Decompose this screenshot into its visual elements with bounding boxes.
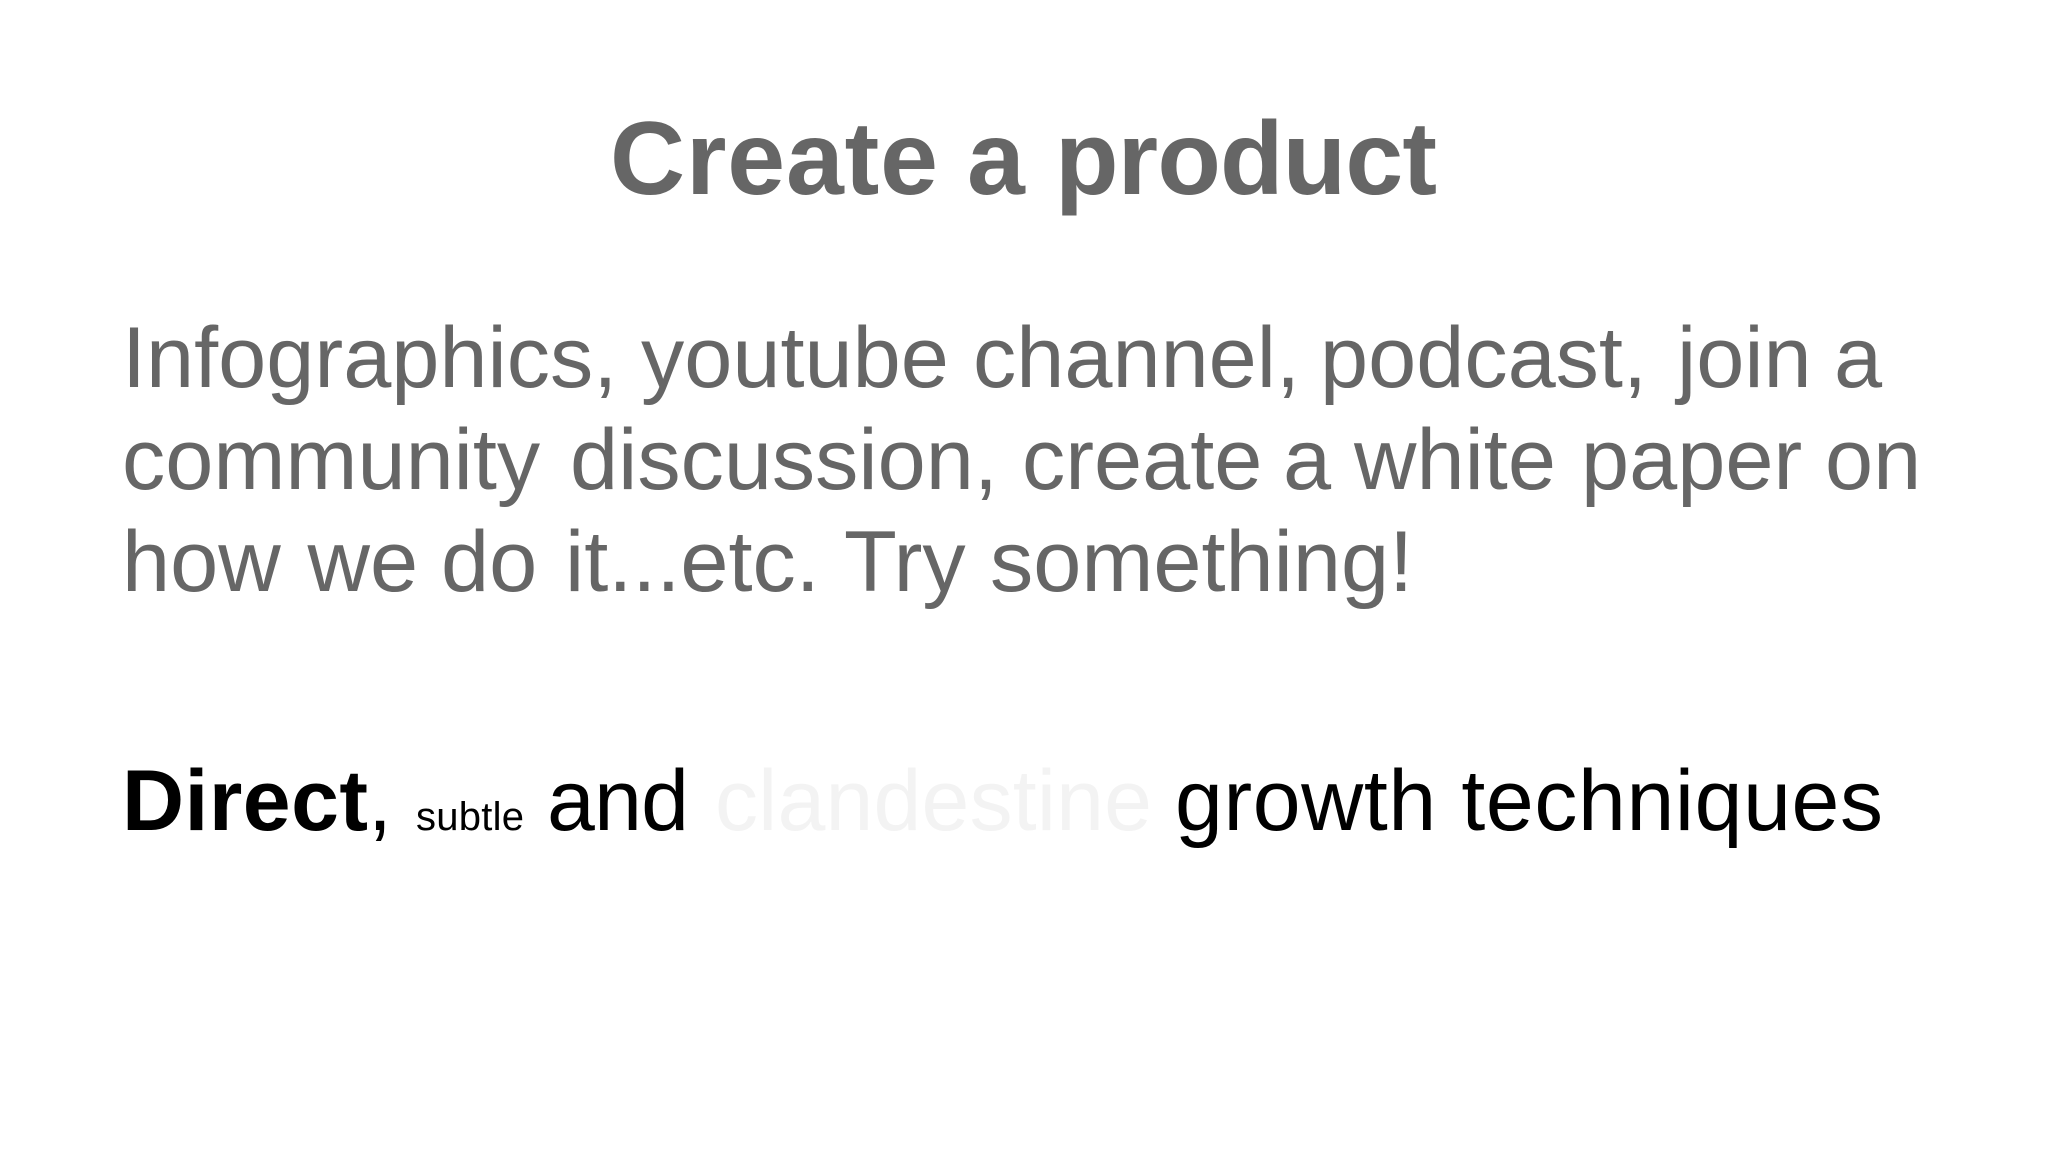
body line 2: paper	[1581, 412, 1802, 508]
body line 3: we	[306, 514, 418, 610]
body line 2: community	[122, 412, 541, 508]
body line 2: a	[1283, 412, 1332, 508]
body line 3: it...etc.	[565, 514, 820, 610]
body line 3: something!	[990, 514, 1413, 610]
word: Direct: Direct	[122, 753, 368, 849]
body text block	[122, 310, 1921, 610]
body line 2: white	[1353, 412, 1556, 508]
title word: product: product	[1055, 101, 1437, 217]
word: clandestine (nearly invisible): clandestine	[715, 753, 1152, 849]
comma: ,	[368, 753, 392, 849]
body line 1: join	[1674, 310, 1812, 406]
body line 1: a	[1834, 310, 1883, 406]
title word: a: a	[967, 101, 1026, 217]
tagline: direct, subtle and clandestine growth techniques	[122, 753, 1883, 849]
body line 1: podcast,	[1320, 310, 1647, 406]
word: subtle: subtle	[416, 795, 524, 839]
word: and: and	[547, 753, 689, 849]
body line 1: youtube	[641, 310, 949, 406]
body line 3: do	[441, 514, 537, 610]
body line 3: how	[122, 514, 281, 610]
title	[610, 101, 1437, 217]
body line 2: create	[1022, 412, 1262, 508]
words: growth techniques: growth techniques	[1175, 753, 1883, 849]
body line 2: on	[1825, 412, 1921, 508]
title word: Create: Create	[610, 101, 938, 217]
body line 1: Infographics,	[122, 310, 617, 406]
body line 3: Try	[844, 514, 966, 610]
body line 2: discussion,	[570, 412, 998, 508]
body line 1: channel,	[973, 310, 1300, 406]
